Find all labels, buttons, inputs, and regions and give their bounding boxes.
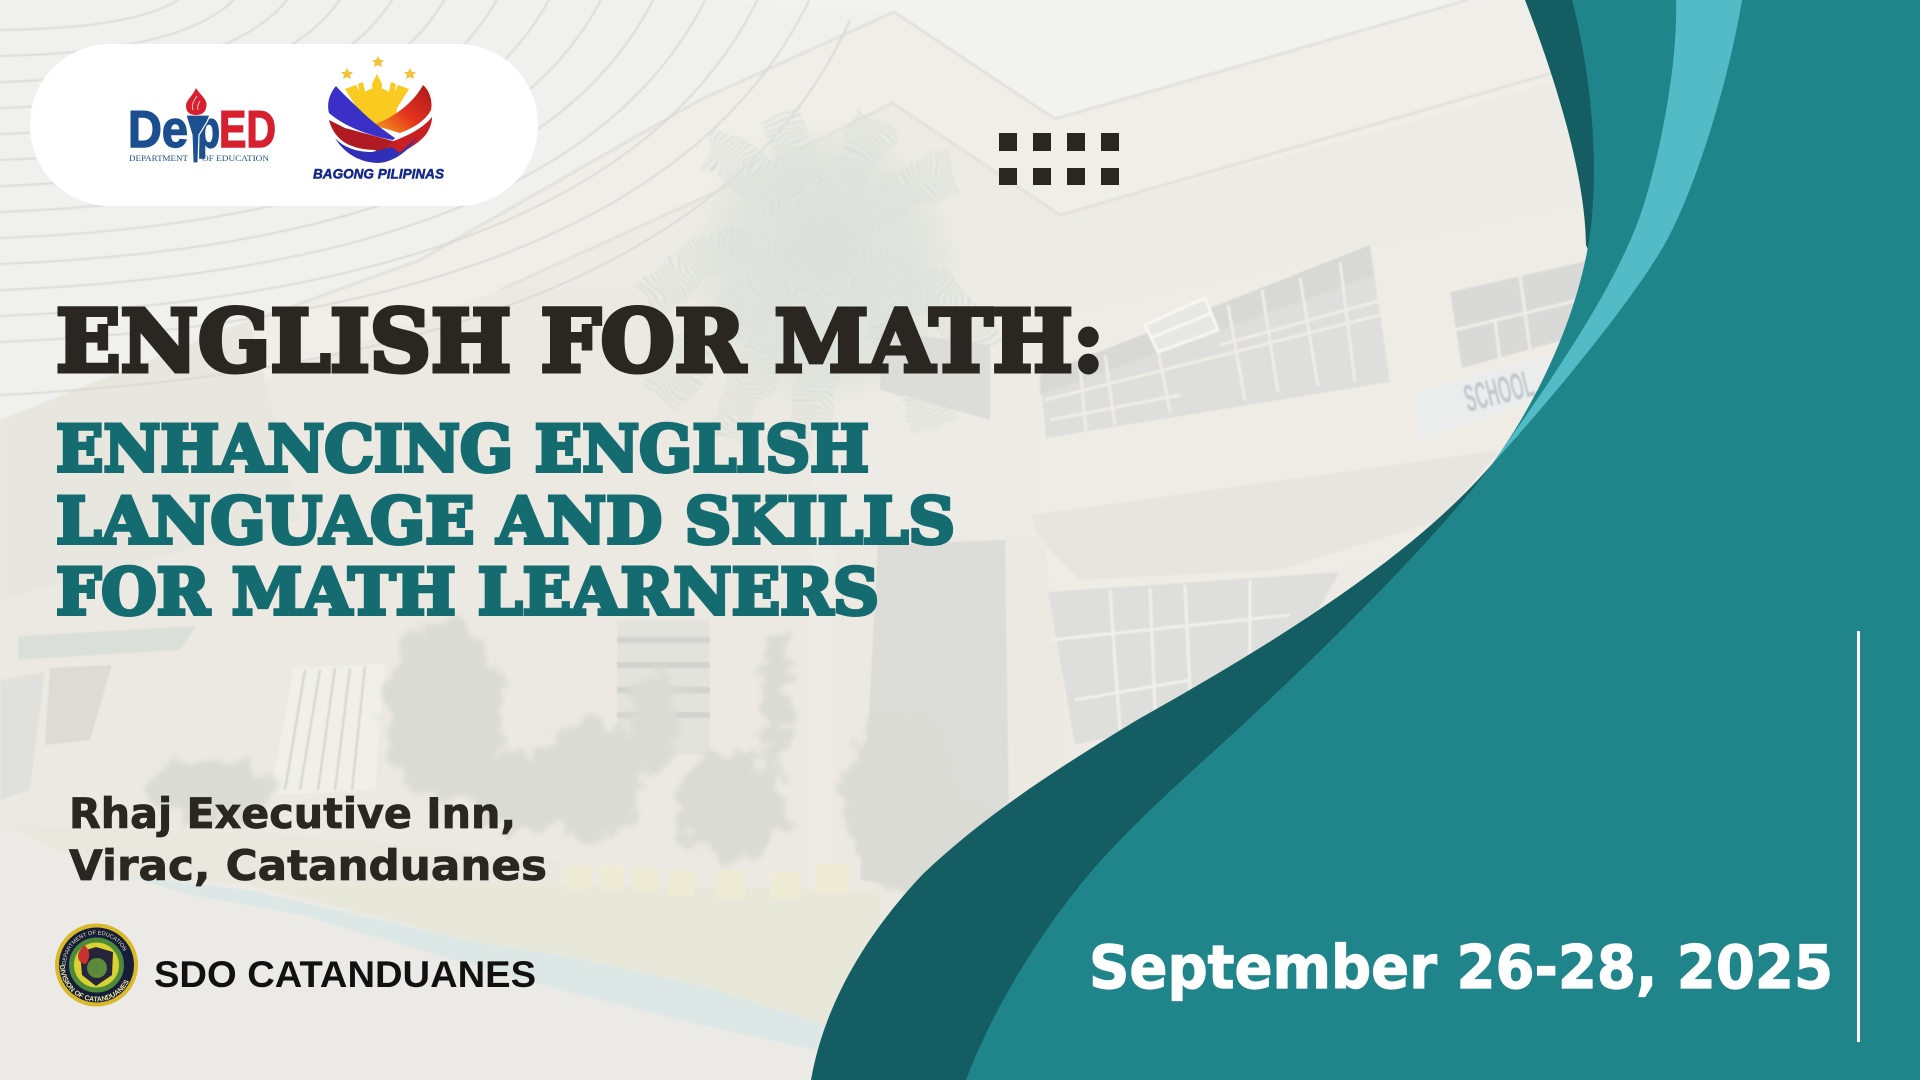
logo: DepEd (128, 88, 276, 163)
air conditioner (1145, 298, 1218, 352)
lower windows (1048, 572, 1340, 745)
icon: SDO seal: DEPARTMENT OF EDUCATION (62, 930, 127, 964)
wave: main teal (966, 0, 1920, 1080)
dark entrance (860, 540, 1010, 900)
icon: SDO seal (55, 924, 138, 1006)
wall, right wing (1000, 200, 1600, 640)
wave: light teal ribbon (1493, 0, 1742, 463)
upper wing fascia (0, 0, 1590, 480)
venue: Virac, Catanduanes (69, 841, 547, 890)
vertical divider line (1857, 631, 1860, 1042)
subtitle: FOR MATH LEARNERS (56, 555, 879, 630)
logo: DepEd: ED (219, 101, 276, 159)
right window (1450, 258, 1600, 368)
subtitle: LANGUAGE AND SKILLS (56, 484, 955, 559)
logo: Bagong Pilipinas: BAGONG PILIPINAS (313, 166, 445, 182)
logo: Bagong Pilipinas (313, 56, 445, 182)
logo pill (30, 44, 538, 206)
awning and door (18, 626, 196, 660)
logo: DepEd: DEPARTMENT (129, 153, 189, 163)
decorative dot grid (999, 133, 1119, 185)
icon: SDO seal: DIVISION OF CATANDUANES (60, 965, 129, 1002)
palm tree (705, 140, 945, 390)
logo: DepEd: p (197, 101, 220, 159)
subtitle: ENHANCING ENGLISH (56, 412, 869, 487)
lower overhang (1030, 450, 1500, 580)
shade behind palm (500, 105, 1040, 620)
palm trunk (808, 420, 836, 930)
logo: DepEd: De (128, 101, 188, 159)
logo: DepEd: OF EDUCATION (202, 153, 269, 163)
grass (250, 885, 880, 1030)
background photo: school building: SCHOOL (1460, 363, 1538, 421)
SDO label: SDO CATANDUANES (154, 954, 536, 995)
left building wall (0, 280, 840, 640)
curved roof on left (0, 0, 894, 430)
striped window (617, 620, 710, 755)
sky (560, 0, 1480, 130)
venue (69, 789, 547, 890)
arcs of curved roof (0, 0, 850, 395)
curb (125, 876, 825, 1052)
sun rays (345, 74, 409, 128)
school sign (1414, 355, 1550, 440)
building lower wall (0, 530, 1080, 1000)
title: ENGLISH FOR MATH: (56, 292, 1104, 392)
plants (145, 620, 1015, 900)
wave: dark teal (811, 0, 1920, 1080)
yellow curb stones (565, 864, 849, 898)
ground: road (0, 830, 840, 1080)
eave shadow, right wing (920, 80, 1600, 400)
venue: Rhaj Executive Inn, (69, 789, 516, 838)
date: September 26-28, 2025 (1089, 933, 1833, 1003)
subtitle (56, 412, 955, 630)
second floor left windows (880, 330, 990, 420)
windows, first floor (1040, 245, 1390, 438)
